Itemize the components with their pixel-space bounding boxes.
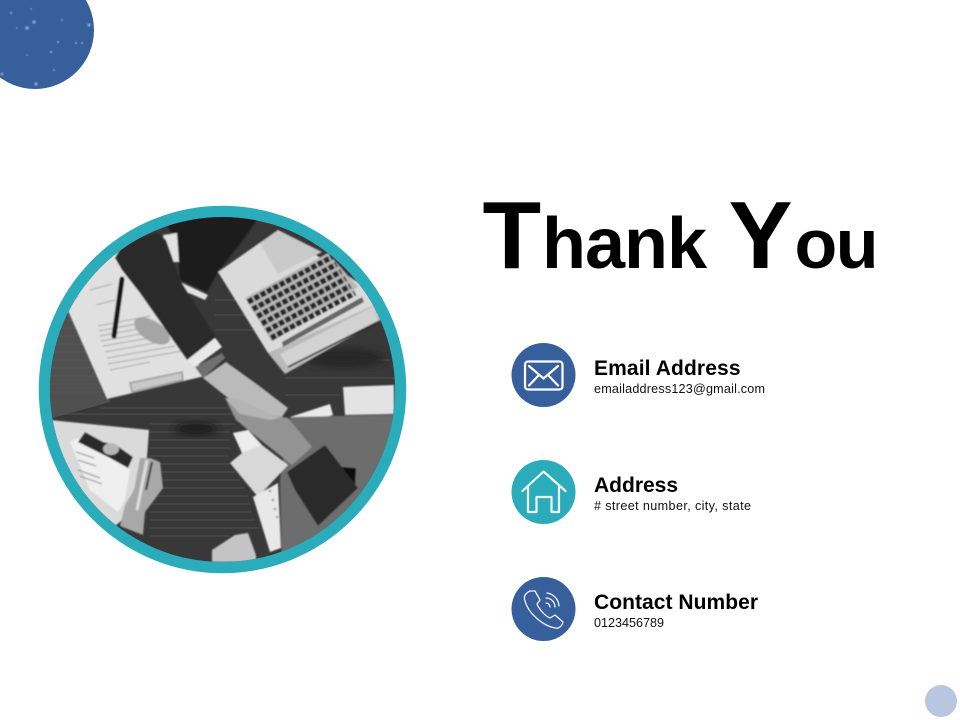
title: T [482,182,541,289]
teal ring [44,212,400,568]
title: Y [728,182,793,289]
photo: handshake in teal ring [40,205,410,575]
phone text: 0123456789 [594,616,664,630]
paper with clipboard [68,250,203,400]
icon: envelope [512,343,576,407]
lower dark sleeve and phone [287,445,358,526]
phone heading: Contact Number [594,591,758,614]
icon: house [512,460,576,524]
address text: # street number, city, state [594,499,751,513]
decorative circle: top-left starry blue [0,0,94,89]
email heading: Email Address [594,357,740,380]
icon: phone [512,577,576,641]
contact: email [512,343,765,407]
white papers on right [230,385,394,565]
laptop [218,230,385,374]
email text: emailaddress123@gmail.com [594,382,765,396]
address heading: Address [594,474,678,497]
bottom-left documents and hand [50,420,163,535]
shaking hands [203,362,312,465]
title: ou [794,205,877,283]
dark jacket and sleeve [115,212,262,378]
bottom fist [212,533,256,562]
pen [114,279,122,336]
contact: address [512,460,751,524]
contact: phone [512,577,758,641]
title: hank [542,204,708,284]
decorative circle: bottom-right pale blue [925,685,957,717]
